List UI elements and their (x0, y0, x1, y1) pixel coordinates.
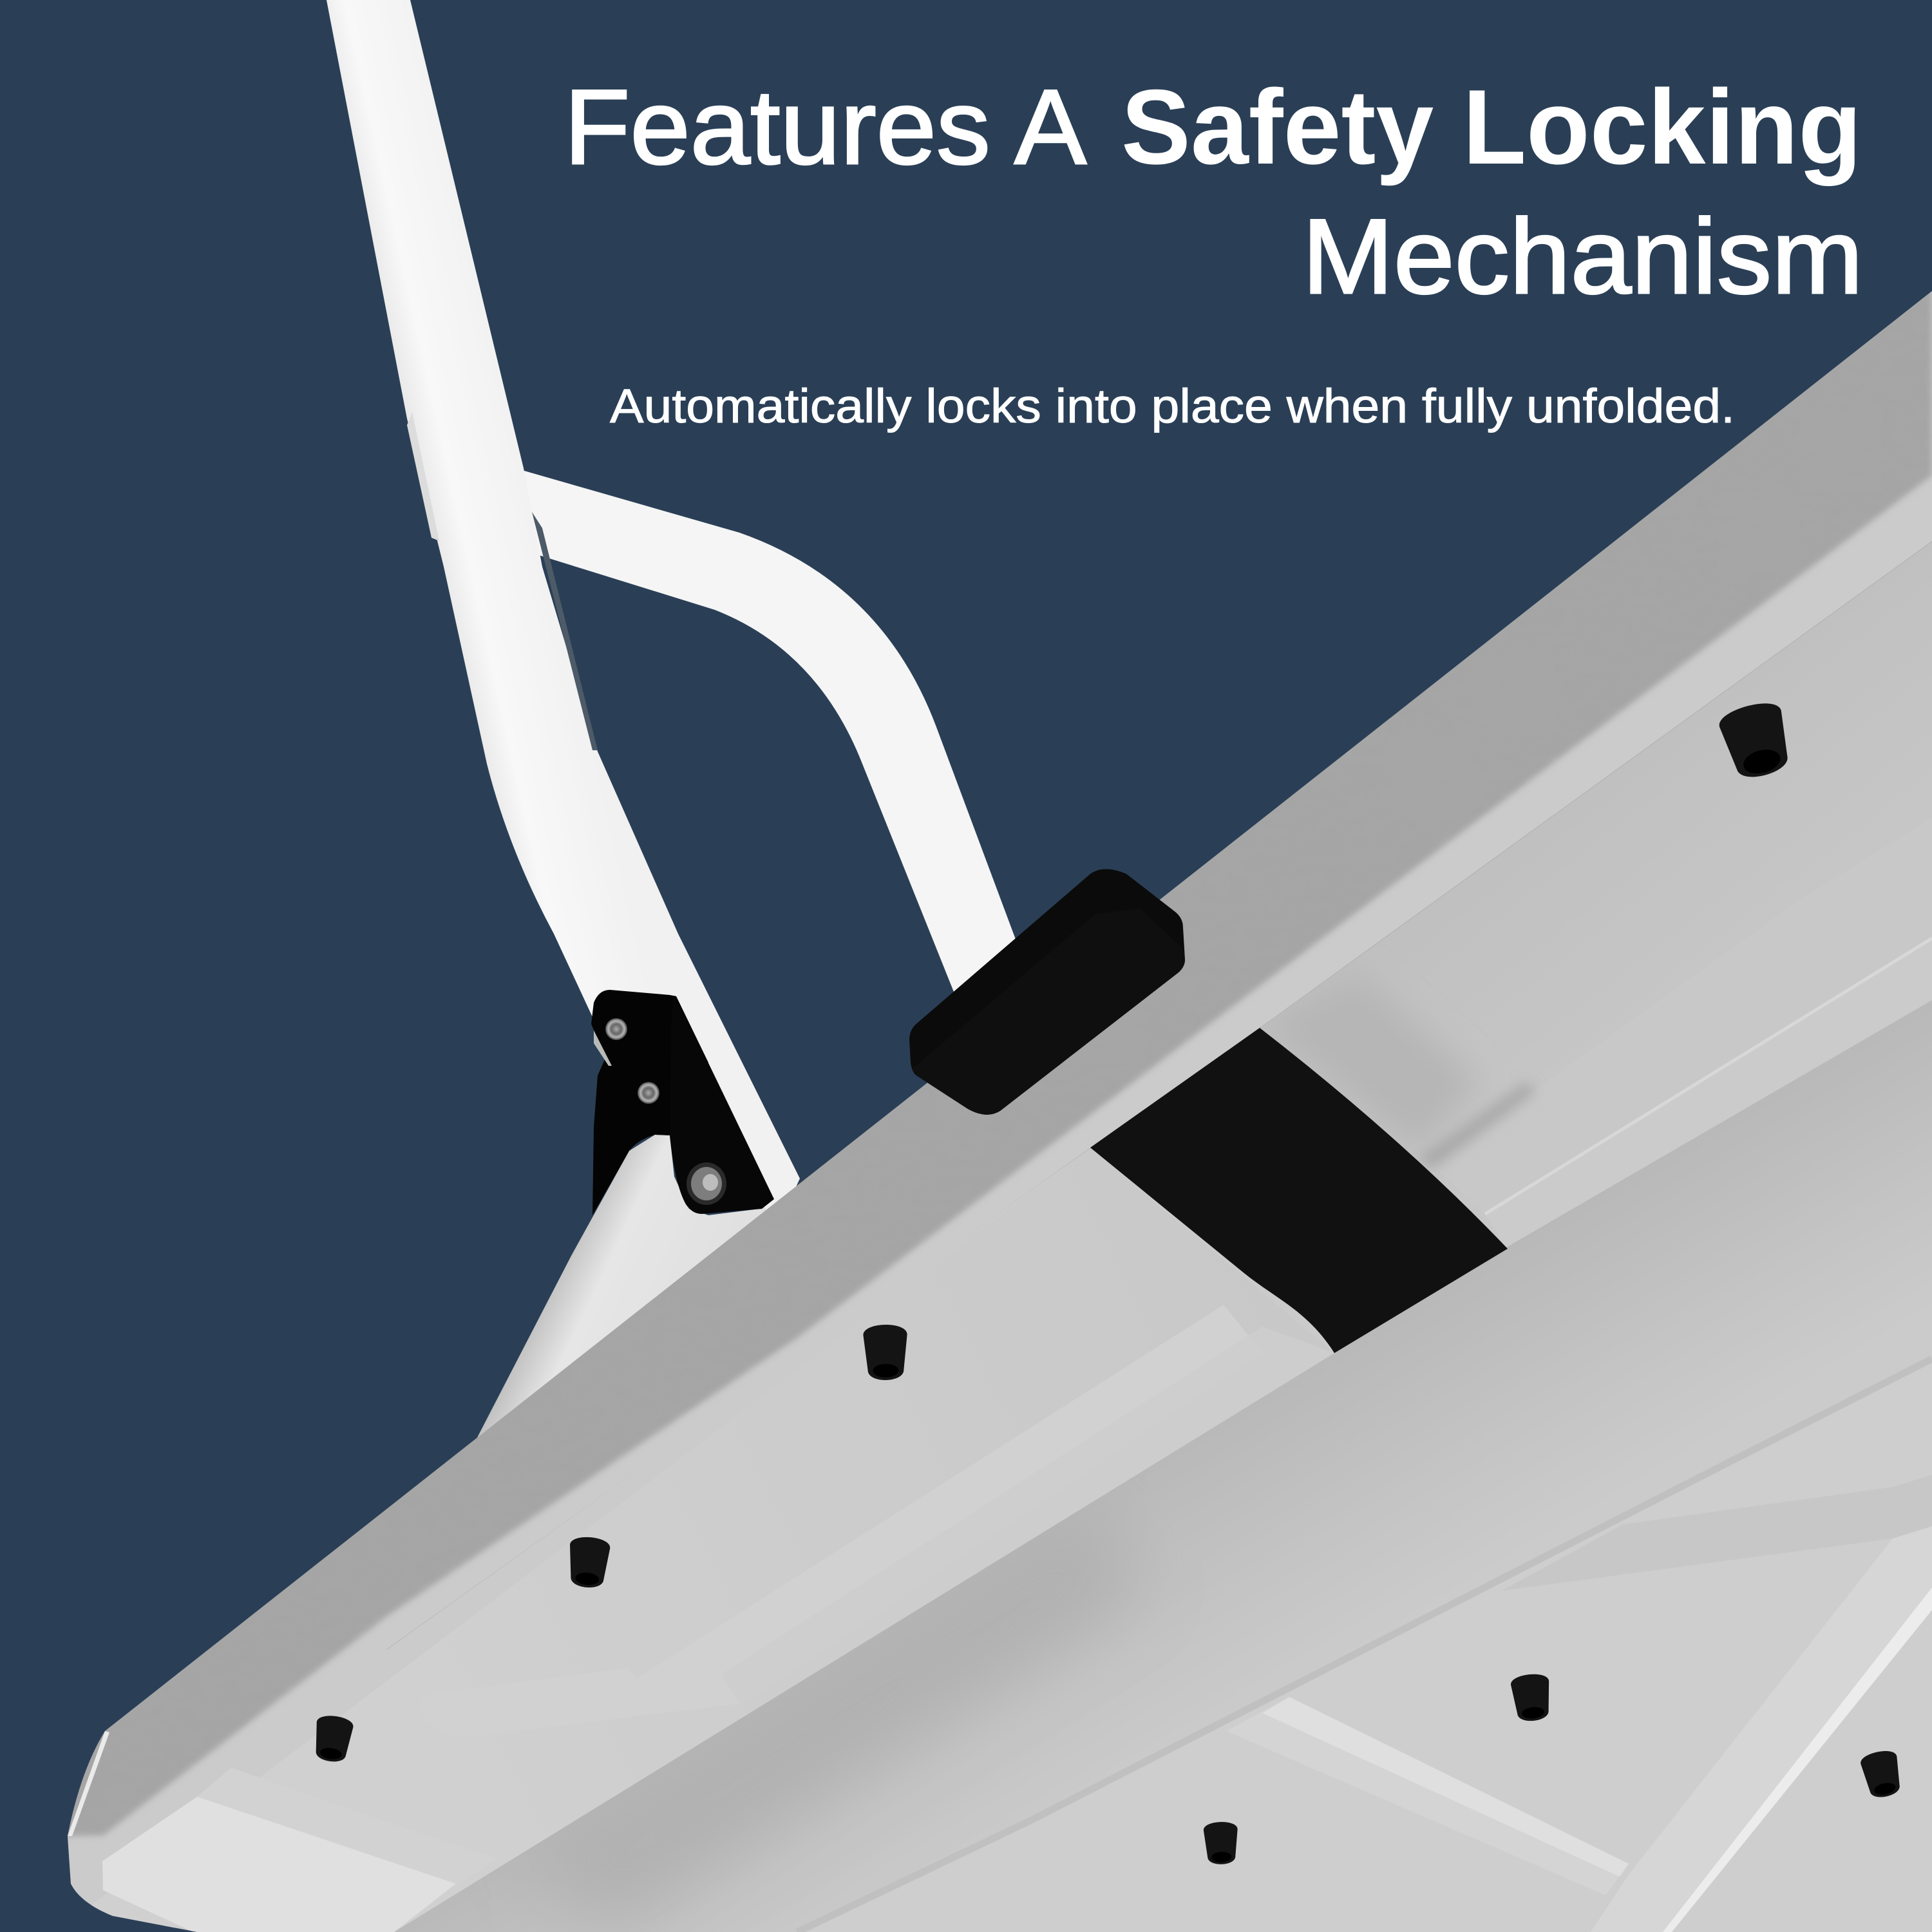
rough ridge line (797, 1359, 1932, 1932)
black lock block (909, 869, 1185, 1115)
light sliver at table edge (68, 1731, 109, 1836)
edge texture (64, 290, 1932, 1868)
table end inner panel (197, 1768, 497, 1886)
silver bracket edge (594, 1030, 612, 1066)
foot 6 (1859, 1748, 1904, 1800)
strip shadow (1417, 1082, 1536, 1169)
foot 5 (1510, 1672, 1553, 1723)
subtitle: Automatically locks into place when fully unfolded. (610, 379, 1735, 433)
shaded trough on lower half (515, 1501, 1146, 1932)
bright hinge line (1485, 938, 1932, 1214)
raised rib upper (1502, 1475, 1932, 1591)
lower half edge restored over emboss (721, 1327, 1334, 1714)
title: Safety Locking (1121, 68, 1862, 186)
left underside panel (91, 1905, 175, 1928)
raised rib diagonal (1226, 1697, 1629, 1895)
screw 1 (605, 1018, 627, 1040)
front bracket plate (670, 996, 774, 1214)
inner panel line left (386, 1148, 1090, 1649)
black locking strap (1090, 1028, 1508, 1353)
lower leg tube (475, 1135, 805, 1443)
pivot bolt (687, 1162, 726, 1205)
shade beside strap (1293, 990, 1468, 1140)
left pill emboss (417, 1305, 1262, 1738)
rear bracket plate (591, 990, 708, 1215)
title: Mechanism (1302, 197, 1863, 316)
raised rib diagonal right (1591, 1481, 1932, 1932)
block front face (912, 908, 1185, 1115)
lower panels surface (797, 1359, 1932, 1932)
textured hinge edge (1485, 938, 1932, 1247)
dark slit on tube (532, 512, 598, 750)
folding frame tubes (327, 0, 1030, 1224)
curved brace arm (515, 468, 1030, 1005)
lower table half (394, 1000, 1932, 1932)
title (564, 68, 1863, 316)
inner panel line right (1260, 541, 1932, 1028)
bright rib edge (1663, 1587, 1932, 1932)
right underside panel (1260, 542, 1932, 1034)
left edge bracket sliver (407, 412, 439, 541)
raised rib bright edge (1262, 1697, 1629, 1877)
foot 4 (312, 1714, 354, 1764)
screw 2 (638, 1082, 659, 1104)
table end bright panel (102, 1797, 456, 1932)
foot 3 (566, 1535, 611, 1589)
rubber feet (312, 698, 1904, 1865)
flat hinge strip (1432, 818, 1932, 1214)
foot 2 (863, 1324, 908, 1381)
foot 1 (1716, 698, 1796, 783)
hinge bracket (591, 990, 774, 1215)
main upright tube (327, 0, 800, 1224)
foot 7 (1203, 1821, 1239, 1865)
block body (909, 869, 1185, 1115)
upper bright band (64, 475, 1932, 1926)
title: Features A (564, 68, 1086, 186)
